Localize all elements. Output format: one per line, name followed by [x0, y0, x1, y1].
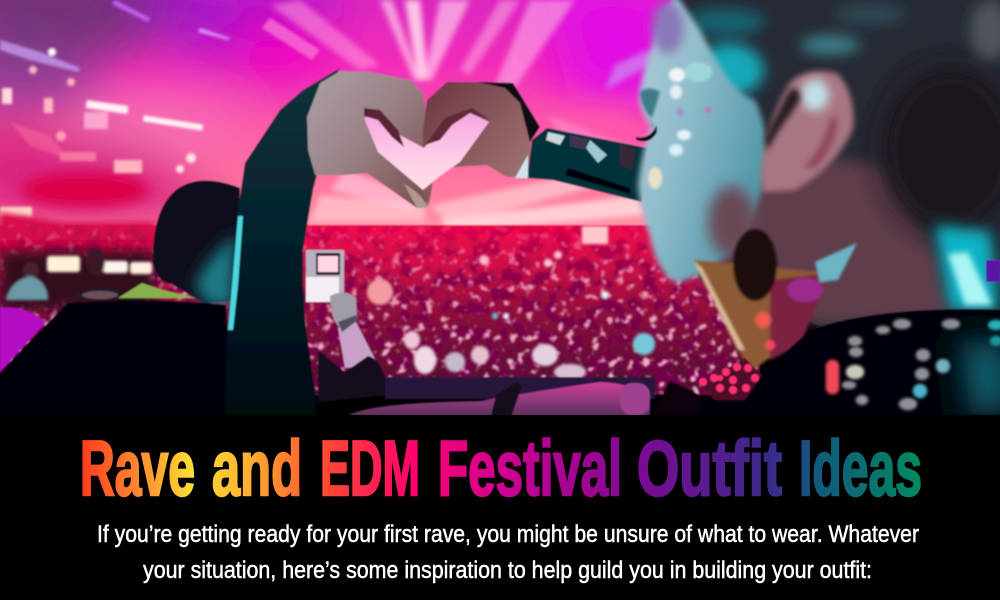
title: Outfit	[637, 424, 782, 512]
crowd texture	[0, 225, 760, 395]
teal hair highlights	[685, 0, 1000, 96]
left hand	[307, 71, 428, 208]
crowd highlights	[367, 226, 655, 380]
crowd	[0, 212, 760, 395]
face	[636, 0, 767, 282]
venue lights, upper left	[0, 0, 320, 217]
right sleeve and glove	[477, 82, 647, 202]
pink beaded necklace	[620, 358, 762, 420]
phone and raised hand	[306, 250, 388, 402]
backpack	[0, 288, 232, 420]
studded necklace	[700, 309, 1000, 420]
laser beams	[270, 0, 655, 232]
right hand	[423, 82, 531, 205]
man's head	[153, 180, 240, 306]
title: Ideas	[799, 424, 922, 512]
teal glow on neck	[935, 225, 1000, 310]
ear	[761, 71, 853, 192]
intro text	[97, 521, 919, 584]
finger details	[364, 108, 490, 208]
title: and	[212, 424, 302, 512]
title: EDM	[320, 424, 420, 512]
title: Rave	[80, 424, 195, 512]
jaw shadow	[708, 186, 756, 258]
intro text: your situation, here’s some inspiration to help guild you in building your outfit:	[143, 557, 872, 584]
forehead tint	[652, 2, 684, 54]
woman's head: hair and neck	[650, 0, 1000, 330]
heart hole	[364, 113, 489, 190]
glitter	[648, 62, 712, 189]
barrier rail	[345, 377, 655, 420]
neck	[700, 150, 950, 325]
photograph: rave crowd with heart hands	[0, 0, 1000, 420]
gold earring	[693, 229, 857, 372]
background people at left	[0, 248, 155, 310]
purple jacket	[0, 308, 46, 372]
sleeve highlight	[228, 216, 243, 330]
dark nape	[880, 65, 1000, 235]
green collar	[118, 283, 196, 298]
eye lashes	[636, 125, 657, 141]
raised left arm	[225, 68, 340, 420]
stage sky	[0, 0, 676, 226]
title	[80, 424, 922, 512]
title: Festival	[438, 424, 622, 512]
